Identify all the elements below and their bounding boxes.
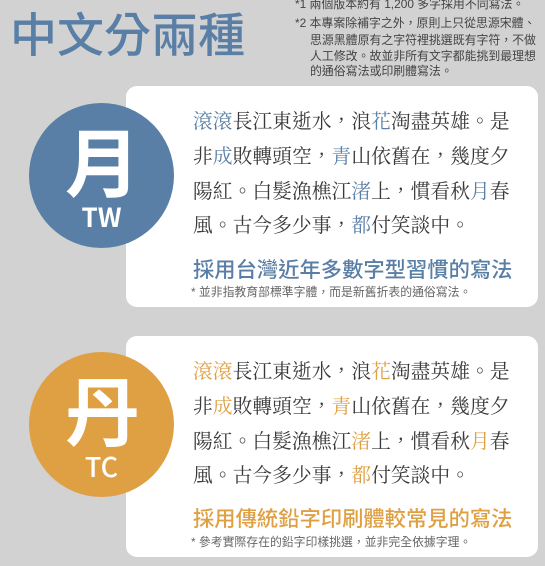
- TW body text: 非成敗轉頭空，青山依舊在，幾度夕: [193, 140, 510, 169]
- footnotes: 人工修改。故並非所有文字都能挑到最理想: [310, 49, 536, 63]
- icon: TC circle badge: [29, 352, 174, 497]
- panel: TW card: [126, 86, 538, 307]
- TC glyph: 丹: [65, 353, 140, 462]
- TW label: TW: [81, 198, 122, 235]
- TW small note: * 並非指教育部標準字體，而是新舊折表的通俗寫法。: [191, 285, 471, 299]
- TW body text: [193, 105, 510, 238]
- footnotes: 思源黑體原有之字符裡挑選既有字符，不做: [310, 33, 536, 47]
- TC body text: 陽紅。白髮漁樵江渚上，慣看秋月春: [193, 425, 510, 454]
- panel: TC card: [126, 336, 538, 557]
- TC body text: 非成敗轉頭空，青山依舊在，幾度夕: [193, 390, 510, 419]
- footnotes: [295, 0, 536, 78]
- TW heading: 採用台灣近年多數字型習慣的寫法: [193, 253, 512, 284]
- footnotes: *2 本專案除補字之外，原則上只從思源宋體、: [295, 16, 535, 30]
- TC heading: 採用傳統鉛字印刷體較常見的寫法: [193, 502, 512, 533]
- TC small note: * 參考實際存在的鉛字印樣挑選，並非完全依據字理。: [191, 535, 471, 549]
- TW glyph: 月: [65, 104, 140, 213]
- TC body text: 滾滾長江東逝水，浪花淘盡英雄。是: [193, 355, 510, 384]
- TW body text: 風。古今多少事，都付笑談中。: [193, 209, 470, 238]
- TW body text: 滾滾長江東逝水，浪花淘盡英雄。是: [193, 105, 510, 134]
- TC label: TC: [85, 446, 118, 485]
- icon: TW circle badge: [29, 103, 174, 248]
- footnotes: 的通俗寫法或印刷體寫法。: [310, 64, 453, 78]
- TW body text: 陽紅。白髮漁樵江渚上，慣看秋月春: [193, 175, 510, 204]
- TC body text: [193, 355, 510, 488]
- TC body text: 風。古今多少事，都付笑談中。: [193, 459, 470, 488]
